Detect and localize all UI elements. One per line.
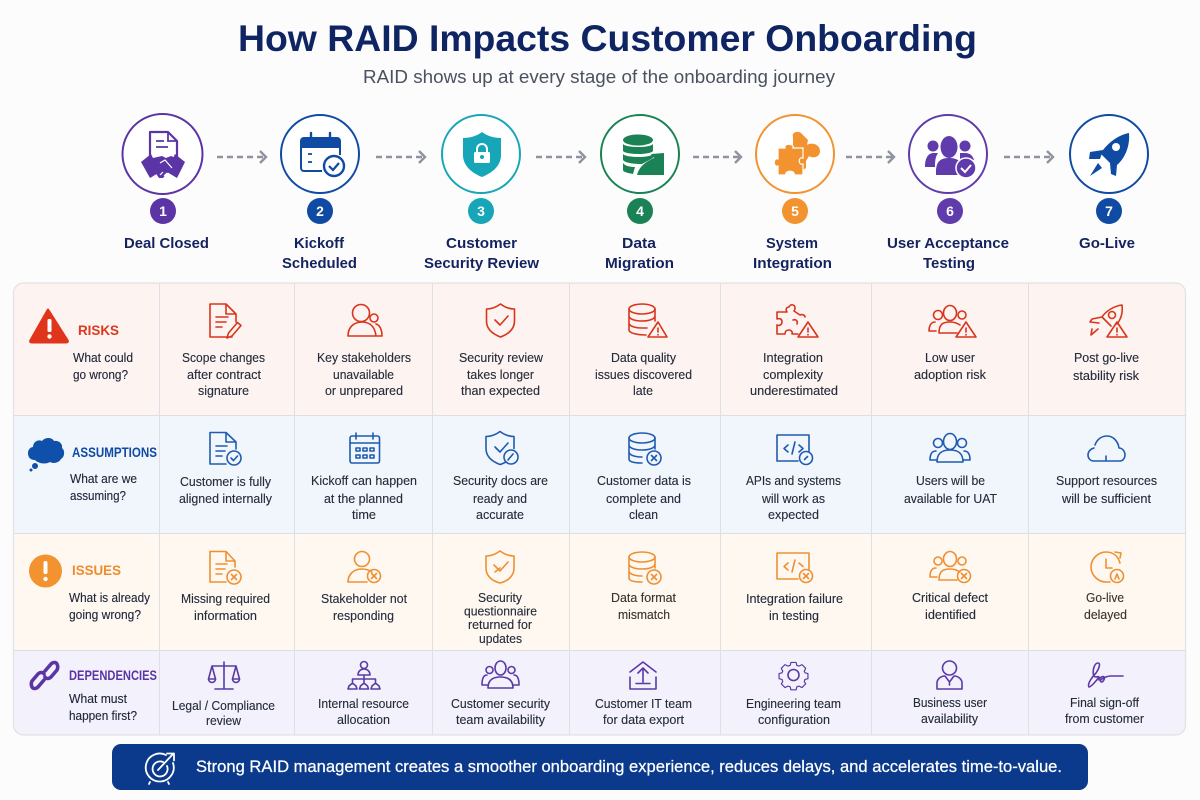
row: Issues (29, 551, 1127, 646)
step 4: Data Migration: Migration (605, 255, 674, 272)
risk: data quality: issues discovered (595, 368, 692, 382)
issue: missing information (181, 552, 270, 623)
dependencies header: DEPENDENCIES (69, 667, 157, 683)
assumption: security docs: accurate (476, 508, 524, 522)
step 5: System Integration: 5 (791, 203, 799, 219)
issue: go-live delayed (1084, 552, 1127, 622)
arrow 5 to 6 (846, 151, 894, 163)
risk: scope changes: after contract (187, 368, 262, 382)
dependency: internal resources: Internal resource (318, 697, 409, 711)
journey timeline (122, 114, 1148, 272)
step 6: User Acceptance Testing (887, 115, 1009, 272)
arrow 6 to 7 (1004, 151, 1053, 163)
assumption: security docs (453, 432, 548, 522)
assumption: customer aligned: Customer is fully (180, 475, 272, 489)
issue: data format mismatch: Data format (611, 591, 677, 605)
step 7: Go-Live (1070, 115, 1148, 252)
dependency: engineering configuration: configuration (758, 713, 830, 727)
risk: data quality (595, 304, 692, 398)
step 7: Go-Live: 7 (1105, 203, 1113, 219)
risk: security review: takes longer (467, 368, 534, 382)
dependency: data export: for data export (603, 713, 685, 727)
assumption: security docs: Security docs are (453, 474, 548, 488)
step 2: Kickoff Scheduled: 2 (316, 203, 324, 219)
risk: integration complexity (750, 305, 838, 398)
dependency: final sign-off: Final sign-off (1070, 696, 1139, 710)
assumption: APIs work: APIs and systems (746, 474, 841, 488)
dependency: business user (913, 661, 987, 726)
row: Dependencies (31, 661, 1144, 728)
issue: integration failure: in testing (769, 609, 819, 623)
step 2: Kickoff Scheduled: Scheduled (282, 255, 357, 272)
risk: post go-live stability: stability risk (1073, 369, 1140, 383)
dependencies header (31, 662, 157, 723)
assumption: kickoff on time: Kickoff can happen (311, 474, 417, 488)
step 3: Customer Security Review: Security Review (424, 255, 539, 272)
assumption: users available: available for UAT (904, 492, 997, 506)
assumption: APIs work (746, 435, 841, 522)
assumptions header: ASSUMPTIONS (72, 444, 157, 460)
step 6: User Acceptance Testing: User Acceptance (887, 235, 1009, 252)
issue: stakeholder not responding (321, 552, 408, 623)
arrow 4 to 5 (693, 151, 741, 163)
dependency: business user: Business user (913, 696, 987, 710)
row: Assumptions (28, 432, 1157, 522)
dependency: data export (595, 662, 692, 727)
arrow 2 to 3 (376, 151, 425, 163)
risk: security review: than expected (461, 384, 540, 398)
assumption: APIs work: will work as (761, 492, 825, 506)
dependency: business user: availability (921, 712, 979, 726)
step 3: Customer Security Review (424, 115, 539, 272)
issue: security questionnaire: updates (479, 632, 522, 646)
risk: low user adoption: adoption risk (914, 368, 987, 382)
issue: security questionnaire (464, 551, 537, 646)
risk: integration complexity: Integration (763, 351, 823, 365)
dependency: final sign-off: from customer (1065, 712, 1144, 726)
dependency: legal review: review (206, 714, 242, 728)
step 2: Kickoff Scheduled (281, 115, 359, 272)
step 7: Go-Live: Go-Live (1079, 235, 1135, 252)
assumptions header: What are we (70, 472, 137, 486)
assumption: users available (904, 434, 997, 506)
risk: key stakeholders: unavailable (333, 368, 394, 382)
assumptions header (28, 438, 157, 503)
dependency: engineering configuration (746, 662, 841, 727)
dependency: internal resources: allocation (337, 713, 390, 727)
risk: low user adoption: Low user (925, 351, 975, 365)
assumption: users available: Users will be (916, 474, 985, 488)
dependency: security team: Customer security (451, 697, 551, 711)
risks header (30, 309, 133, 382)
risk: data quality: Data quality (611, 351, 677, 365)
risk: security review: Security review (459, 351, 544, 365)
title: How RAID Impacts Customer Onboarding (238, 18, 977, 59)
risk: key stakeholders: Key stakeholders (317, 351, 411, 365)
dependencies header: What must (69, 692, 127, 706)
dependency: final sign-off (1065, 663, 1144, 726)
risk: low user adoption (914, 306, 987, 382)
assumption: support resources (1056, 436, 1157, 506)
step 5: System Integration: Integration (753, 255, 832, 272)
dependency: security team (451, 661, 551, 727)
dependency: security team: team availability (456, 713, 546, 727)
issue: missing information: information (194, 609, 257, 623)
issue: stakeholder not responding: Stakeholder not (321, 592, 408, 606)
issue: go-live delayed: Go-live (1086, 591, 1124, 605)
issues header: going wrong? (69, 608, 141, 622)
issue: data format mismatch (611, 552, 677, 622)
dependency: engineering configuration: Engineering team (746, 697, 841, 711)
risk: key stakeholders (317, 304, 411, 398)
assumption: support resources: Support resources (1056, 474, 1157, 488)
issue: critical defect: identified (925, 608, 976, 622)
issue: critical defect: Critical defect (912, 591, 989, 605)
risk: scope changes: Scope changes (182, 351, 265, 365)
step 1: Deal Closed: 1 (159, 203, 167, 219)
risk: data quality: late (633, 384, 653, 398)
step 5: System Integration: System (766, 235, 818, 252)
assumption: customer data: Customer data is (597, 474, 691, 488)
issue: integration failure (746, 553, 843, 623)
risk: key stakeholders: or unprepared (325, 384, 403, 398)
risk: post go-live stability: Post go-live (1074, 351, 1139, 365)
step 2: Kickoff Scheduled: Kickoff (294, 235, 345, 252)
step 3: Customer Security Review: Customer (446, 235, 517, 252)
issue: data format mismatch: mismatch (618, 608, 670, 622)
step 4: Data Migration: 4 (636, 203, 644, 219)
issue: go-live delayed: delayed (1084, 608, 1127, 622)
risks header: RISKS (78, 322, 119, 338)
assumption: kickoff on time: time (352, 508, 376, 522)
assumption: customer data: clean (629, 508, 658, 522)
step 5: System Integration (753, 115, 834, 272)
risk: scope changes: signature (198, 384, 249, 398)
assumption: APIs work: expected (768, 508, 819, 522)
risk: security review (459, 304, 544, 398)
assumption: customer data: complete and (606, 492, 681, 506)
risks header: What could (73, 351, 133, 365)
icon: target with arrow (146, 754, 174, 784)
assumption: security docs: ready and (473, 492, 527, 506)
step 6: User Acceptance Testing: 6 (946, 203, 954, 219)
issue: missing information: Missing required (181, 592, 270, 606)
banner message: Strong RAID management creates a smoother onboarding experience, reduces delays, and accelerates time-to-value. (196, 757, 1062, 776)
risks header: go wrong? (73, 368, 128, 382)
step 6: User Acceptance Testing: Testing (923, 255, 975, 272)
dependencies header: happen first? (69, 709, 137, 723)
assumption: customer aligned (179, 432, 273, 506)
assumption: customer data (597, 433, 691, 522)
subtitle: RAID shows up at every stage of the onboarding journey (363, 67, 835, 87)
step 1: Deal Closed: Deal Closed (124, 235, 209, 252)
issue: security questionnaire: questionnaire (464, 604, 537, 618)
assumptions header: assuming? (70, 489, 126, 503)
step 1: Deal Closed (122, 114, 209, 252)
takeaway banner (112, 744, 1088, 790)
dependency: legal review (172, 662, 275, 728)
risk: integration complexity: underestimated (750, 384, 838, 398)
issue: security questionnaire: Security (478, 591, 523, 605)
dependency: data export: Customer IT team (595, 697, 692, 711)
risk: scope changes (182, 304, 265, 398)
assumption: kickoff on time: at the planned (324, 492, 403, 506)
risk: post go-live stability (1073, 305, 1140, 383)
step 4: Data Migration: Data (622, 235, 657, 252)
issue: integration failure: Integration failure (746, 592, 843, 606)
RAID matrix panel (13, 283, 1186, 735)
issue: stakeholder not responding: responding (333, 609, 394, 623)
issues header: What is already (69, 591, 151, 605)
step 3: Customer Security Review: 3 (477, 203, 485, 219)
arrow 1 to 2 (217, 151, 266, 163)
dependency: legal review: Legal / Compliance (172, 699, 275, 713)
assumption: customer aligned: aligned internally (179, 492, 273, 506)
issue: critical defect (912, 552, 989, 622)
arrow 3 to 4 (536, 151, 585, 163)
issue: security questionnaire: returned for (468, 618, 532, 632)
risk: integration complexity: complexity (763, 368, 824, 382)
assumption: support resources: will be sufficient (1061, 492, 1152, 506)
dependency: internal resources (318, 662, 409, 727)
issues header (29, 554, 151, 622)
row: Risks (30, 304, 1140, 398)
assumption: kickoff on time (311, 433, 417, 522)
issues header: ISSUES (72, 562, 121, 578)
step 4: Data Migration (601, 115, 679, 272)
